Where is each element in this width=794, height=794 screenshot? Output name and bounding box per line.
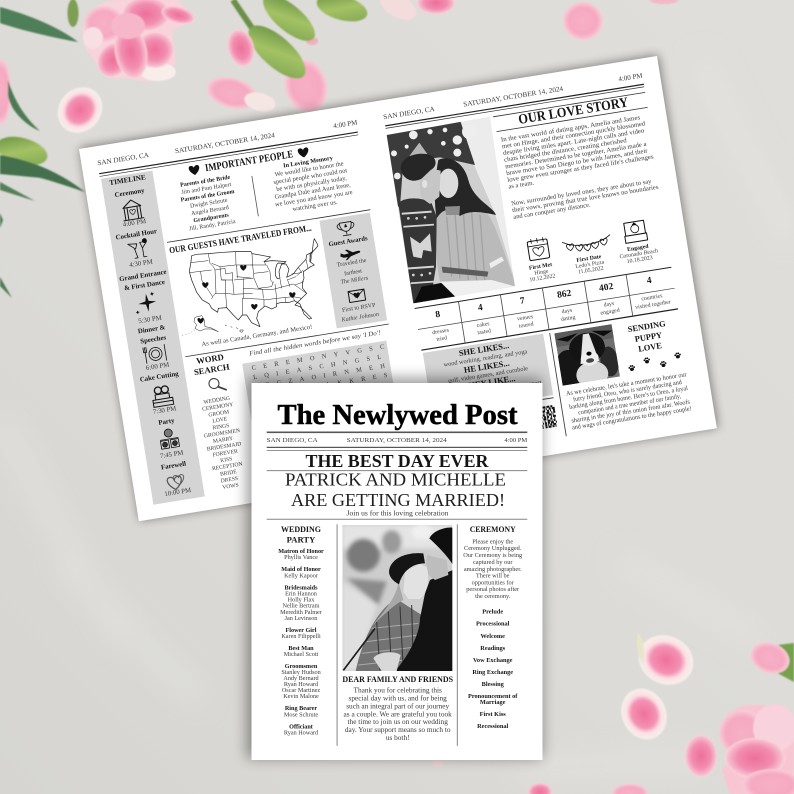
text: in loving memory: special people who could not (273, 167, 348, 186)
back sheet: two page newspaper spread (79, 56, 717, 521)
panel: timeline (101, 171, 205, 505)
panel: guest awards: Guest Awards (328, 235, 369, 248)
icon: chapel (121, 198, 144, 221)
headline: names: ARE GETTING MARRIED! (291, 490, 505, 510)
stats table: engaged (600, 308, 620, 317)
milestones: first met, first date, engaged: 10.18.2023 (626, 255, 653, 265)
panel: timeline: 7:30 PM (152, 405, 177, 416)
word search grid letters: ERDNVLAKKRES (256, 371, 395, 400)
headline: names (285, 470, 506, 510)
text: love story: chats bridged the distance, creating cherished (504, 137, 628, 164)
column: ceremony: First Kiss (480, 711, 506, 718)
heading: sending puppy love: SENDING (627, 319, 667, 334)
text: love story: Now, surrounded by loved ones, they are about to say (511, 178, 653, 207)
photo: couple embracing (386, 116, 515, 304)
text: family list: Jill, Randy, Patricia (189, 219, 236, 232)
panel: timeline: Party (158, 417, 176, 427)
masthead: The Newlywed Post: The Newlywed Post (278, 399, 518, 431)
stats table: cakes (476, 321, 491, 329)
panel: timeline: Speeches (140, 334, 167, 345)
column: wedding party: Jan Levinson (285, 615, 317, 622)
milestones: first met, first date, engaged: First Date (576, 254, 602, 264)
stats table: 4 (477, 303, 484, 314)
stats table: 8 (435, 310, 441, 320)
heading: important people: IMPORTANT PEOPLE (204, 149, 294, 174)
column: ceremony: Marriage (480, 699, 506, 706)
text: dear family and friends (342, 675, 453, 742)
column: wedding party: Flower Girl (286, 627, 317, 634)
text: puppy message (566, 371, 693, 432)
right page header (383, 71, 645, 129)
panel: guest awards: Traveled the (336, 258, 367, 269)
text: in loving memory: Grandpa Dale and Aunt Irene, (274, 182, 352, 201)
text: word list (198, 395, 249, 493)
text: love story: met on Hinge, and their connection quickly blossomed (501, 120, 647, 150)
dateline: 4:00 PM (504, 437, 527, 444)
column: ceremony: Welcome (480, 633, 505, 640)
photo: puppy (554, 324, 620, 386)
text: puppy message: barking along from home. Here's to Oreo, a loyal (569, 385, 688, 411)
column: ceremony: captured by our (473, 559, 513, 566)
text: dear family and friends: such an integral part of our journey (346, 702, 450, 710)
column: wedding party: Nellie Bertram (283, 602, 320, 610)
text: family list: Angela Bernard (191, 205, 229, 217)
column: wedding party: Ryan Howard (284, 681, 319, 688)
column: wedding party: Ryan Howard (284, 730, 319, 736)
panel: timeline: TIMELINE (109, 173, 147, 187)
column: ceremony: Our Ceremony is being (463, 552, 523, 559)
panel: guest awards: The Millers (340, 275, 369, 286)
panel: timeline: 7:45 PM (160, 450, 184, 460)
heading: sending puppy love: PUPPY (634, 331, 663, 344)
QR code (533, 406, 557, 429)
column: wedding party: Stanley Hudson (281, 669, 321, 676)
left page header (97, 117, 360, 177)
text: dear family and friends: us both! (386, 733, 410, 742)
column: wedding party: Mose Schrute (284, 712, 318, 718)
text: love story: memories. Determined to be together, Amelia made a (505, 141, 647, 170)
text: family list: Dwight Schrute (190, 198, 228, 210)
stats table: days (603, 301, 615, 309)
panel: she likes he likes: SHE LIKES... (458, 341, 510, 358)
column: ceremony: opportunities for (472, 580, 515, 586)
panel: important people (156, 139, 370, 243)
dateline (267, 432, 527, 451)
text: in loving memory: we love you and know you are (275, 189, 353, 208)
icon: wedding cake (151, 385, 174, 407)
heading: sending puppy love: LOVE (638, 341, 663, 354)
chart: US map of guests (180, 239, 318, 336)
text: puppy message: companion and a true member of our family, (578, 393, 682, 416)
stats table: dating (561, 315, 576, 323)
column: ceremony: Blessing (482, 681, 505, 688)
flowers: top left carnation, buds, leaves and petals (0, 0, 678, 298)
panel: timeline: & First Dance (124, 279, 165, 292)
right page header: 4:00 PM (618, 71, 644, 83)
dateline: SAN DIEGO, CA (267, 437, 318, 444)
column: wedding party: Andy Bernard (283, 675, 320, 682)
icon: party speakers and disco ball (159, 428, 180, 449)
icon: dinner plate (143, 344, 167, 364)
word search grid letters: LQIEASCHNGSL (253, 352, 389, 381)
text: family list (178, 174, 240, 233)
stats table: visited together (635, 299, 671, 311)
icon: envelope with heart (348, 289, 366, 303)
text: puppy message: furry friend, Oreo, who is surely dancing and (573, 379, 683, 403)
stats table: 4 (646, 276, 653, 286)
panel: timeline: Grand Entrance (119, 269, 167, 283)
panel: timeline: 10:00 PM (164, 487, 192, 498)
text: dear family and friends: Thank you for celebrating this (354, 686, 442, 694)
text: love story: brave move to San Diego to be with James, and their (506, 147, 649, 177)
text: family list: Grandparents (193, 212, 230, 224)
column: ceremony: Processional (476, 620, 510, 628)
milestones: first met, first date, engaged: 10.12.2022 (529, 273, 556, 283)
column: wedding party: Holly Flax (288, 596, 315, 604)
text: love story: love grew even stronger as they faced life's challenges (507, 153, 655, 184)
text: word list: MARRY (213, 436, 234, 445)
front sheet shadow (247, 378, 542, 758)
stats table: tasted (477, 328, 492, 336)
panel: timeline: Dinner & (137, 324, 166, 335)
dateline: SATURDAY, OCTOBER 14, 2024 (347, 437, 447, 444)
column: wedding party: Ring Bearer (285, 705, 317, 712)
panel: guest awards: First to RSVP (342, 303, 377, 314)
panel: she likes he likes (423, 334, 554, 417)
stats table: venues (517, 314, 534, 323)
front sheet: newspaper program (252, 383, 542, 760)
heading: sending puppy love (627, 319, 670, 355)
text: in loving memory: be with us physically today, (276, 175, 348, 193)
text: family list: Jim and Pam Halpert (181, 182, 232, 196)
text: word list: VOWS (222, 482, 239, 491)
icon: heart bunting (562, 235, 612, 255)
column: wedding party: WEDDING (281, 524, 321, 534)
panel: timeline: 4:00 PM (122, 218, 147, 229)
column: wedding party: Officiant (289, 724, 314, 730)
panel: timeline: Cocktail Hour (115, 228, 158, 242)
text: dear family and friends: DEAR FAMILY AND FRIENDS (342, 675, 453, 684)
column: wedding party: Best Man (288, 645, 314, 652)
stats table: toured (519, 321, 534, 330)
panel: timeline: Cake Cutting (139, 370, 180, 384)
panel: she likes he likes: golf, video games, and cornhole (448, 365, 529, 385)
column: ceremony: the ceremony. (475, 593, 511, 600)
panel: timeline: 4:30 PM (129, 258, 153, 269)
column: wedding party: Michael Scott (284, 651, 319, 658)
milestones: first met, first date, engaged: Hinge (534, 269, 549, 277)
panel: timeline: Ceremony (114, 187, 146, 199)
heading: our love story: OUR LOVE STORY (517, 95, 629, 128)
icon: paw prints (627, 352, 682, 373)
caption: as well as: As well as Canada, Germany, and Mexico! (201, 324, 313, 348)
flowers: bottom right petals and carnation (432, 626, 794, 794)
left page header: SATURDAY, OCTOBER 14, 2024 (174, 131, 276, 155)
panel: she likes he likes: THEY LIKE... (463, 374, 516, 391)
panel: timeline: Farewell (161, 461, 187, 471)
column: wedding party: Matron of Honor (278, 548, 324, 555)
column: ceremony: CEREMONY (470, 524, 516, 534)
panel: word search: SEARCH (193, 361, 230, 377)
text: love story: despite living miles apart. Late-night calls and video (503, 127, 645, 157)
headline: the best day ever: THE BEST DAY EVER (306, 451, 489, 471)
stats table (415, 267, 678, 351)
milestones: first met, first date, engaged (523, 219, 660, 283)
column: wedding party: Erin Hannon (285, 590, 317, 598)
text: family list: Parents of the Groom (180, 189, 235, 204)
word search grid letters (251, 342, 397, 400)
subheading: join us: Join us for this loving celebration (346, 510, 449, 518)
text: word list: GROOM (208, 409, 230, 419)
milestones: first met, first date, engaged: First Met (529, 262, 553, 272)
text: word list: LOVE (212, 416, 228, 425)
panel: guest awards: farthest (344, 267, 363, 277)
word search grid letters: TPGZAOIRNMEH (254, 362, 393, 391)
text: in loving memory: watching over us. (292, 199, 338, 213)
text: dear family and friends: special day with us, and for being (349, 694, 447, 702)
panel: timeline: 6:00 PM (145, 361, 170, 372)
column: ceremony: personal photos after (466, 586, 520, 593)
stats table: days (561, 308, 573, 315)
heading: guests have traveled: OUR GUESTS HAVE TRAVELED FROM... (168, 223, 312, 255)
column: wedding party: Karen Filippelli (281, 633, 321, 640)
text: puppy message: As we celebrate, let's take a moment to honor our (566, 371, 688, 397)
icon: sparkles (133, 291, 158, 315)
column: ceremony: Vow Exchange (473, 657, 513, 664)
column: wedding party: Maid of Honor (281, 566, 321, 573)
right page header: SATURDAY, OCTOBER 14, 2024 (463, 85, 564, 109)
text: in loving memory: In Loving Memory (283, 155, 334, 170)
milestones: first met, first date, engaged: 11.05.2022 (578, 266, 604, 276)
column: wedding party: Oscar Martinez (282, 687, 320, 694)
panel: timeline: 5:30 PM (138, 315, 162, 325)
text: word list: RECEPTION (212, 461, 243, 472)
word search grid letters: CEREMONYVGSC (251, 342, 392, 372)
column: ceremony: There will be (476, 572, 510, 580)
panel: she likes he likes: wood working, reading, and yoga (443, 348, 528, 369)
column: ceremony: Please enjoy the (472, 538, 513, 546)
column: ceremony: Readings (480, 645, 506, 652)
text: love story: and can conquer any distance. (513, 202, 591, 221)
column: wedding party (278, 524, 324, 736)
panel: word search: Find all the hidden words before we say 'I Do'! (248, 329, 381, 358)
milestones: first met, first date, engaged: Coronado Beach (619, 248, 659, 260)
panel: guest awards (319, 213, 387, 328)
headline: names: PATRICK AND MICHELLE (285, 470, 506, 490)
panel: word search (191, 325, 410, 493)
text: word list: FOREVER (212, 449, 239, 459)
icon: airplane (339, 246, 361, 261)
icon: ring box (623, 220, 648, 243)
panel: guest awards: Kathie Johnson (340, 312, 379, 324)
text: dear family and friends: the time to join us on our wedding (348, 717, 448, 726)
stats table: 862 (556, 289, 572, 301)
text: in loving memory (269, 152, 354, 216)
icon: calendar with heart (527, 237, 550, 261)
column: ceremony (463, 524, 523, 730)
left page header: 4:00 PM (333, 118, 359, 130)
column: wedding party: Bridesmaids (284, 584, 318, 592)
stats table: dresses (432, 327, 450, 336)
photo: couple in winter coats (342, 523, 453, 671)
column: ceremony: amazing photographer. (464, 566, 522, 573)
text: word list: CEREMONY (202, 402, 234, 413)
text: in loving memory: We would like to honor the (274, 160, 344, 178)
panel: she likes he likes: traveling, trying new food, and any sport (439, 379, 542, 402)
milestones: first met, first date, engaged: Engaged (627, 244, 650, 253)
text: love story (500, 113, 661, 221)
column: ceremony: Ceremony Unplugged. (464, 545, 522, 552)
icon: magnifying glass (208, 377, 226, 392)
text: word list: WEDDING (203, 396, 230, 406)
text: word list: KISS (220, 456, 233, 464)
stats table: 7 (519, 296, 526, 307)
icon: cocktail glasses (127, 238, 149, 259)
column: wedding party: Meredith Palmer (280, 609, 322, 616)
column: wedding party: Kevin Malone (283, 693, 319, 700)
panel: word search: WORD (196, 352, 224, 366)
column: wedding party: Kelly Kapoor (284, 572, 318, 580)
text: word list: RINGS (212, 423, 230, 431)
text: word list: BRIDESMAID (207, 441, 242, 453)
column: wedding party: Phyllis Vance (284, 554, 318, 561)
column: ceremony: Ring Exchange (472, 669, 513, 676)
text: dear family and friends: day. Your support means so much to (345, 725, 451, 734)
text: puppy message: sharing in the joy of this union from afar. Woofs (571, 399, 691, 425)
text: puppy message: and wags of congratulations to the happy couple! (572, 405, 692, 431)
stats table: tried (436, 335, 448, 343)
icon: linked hearts (167, 474, 185, 491)
text: love story: as a team. (508, 180, 535, 191)
icon: hearts (188, 147, 309, 176)
milestones: first met, first date, engaged: Ledo's Pizza (575, 259, 605, 270)
column: wedding party: PARTY (287, 535, 316, 545)
column: ceremony: Prelude (482, 608, 503, 616)
left page header: SAN DIEGO, CA (97, 151, 149, 167)
text: love story: In the vast world of dating apps, Amelia and James (500, 114, 641, 144)
column: ceremony: Recessional (477, 723, 509, 730)
text: word list: BRIDE (220, 469, 238, 478)
column: ceremony: Pronouncement of (468, 693, 518, 700)
panel: she likes he likes: HE LIKES... (463, 359, 510, 375)
icon: trophy (337, 221, 355, 237)
right page header: SAN DIEGO, CA (383, 105, 435, 121)
text: word list: DRESS (220, 476, 239, 484)
text: family list: Parents of the Bride (180, 175, 231, 189)
text: word list: GROOMSMEN (204, 428, 240, 440)
text: dear family and friends: as a couple. We are grateful you took (344, 710, 452, 718)
column: wedding party: Groomsmen (285, 663, 318, 670)
stats table: countries (641, 293, 664, 303)
stats table: 402 (598, 282, 614, 294)
text: love story: their vows, proving that true love knows no boundaries (512, 184, 659, 214)
back sheet shadow (80, 55, 718, 520)
